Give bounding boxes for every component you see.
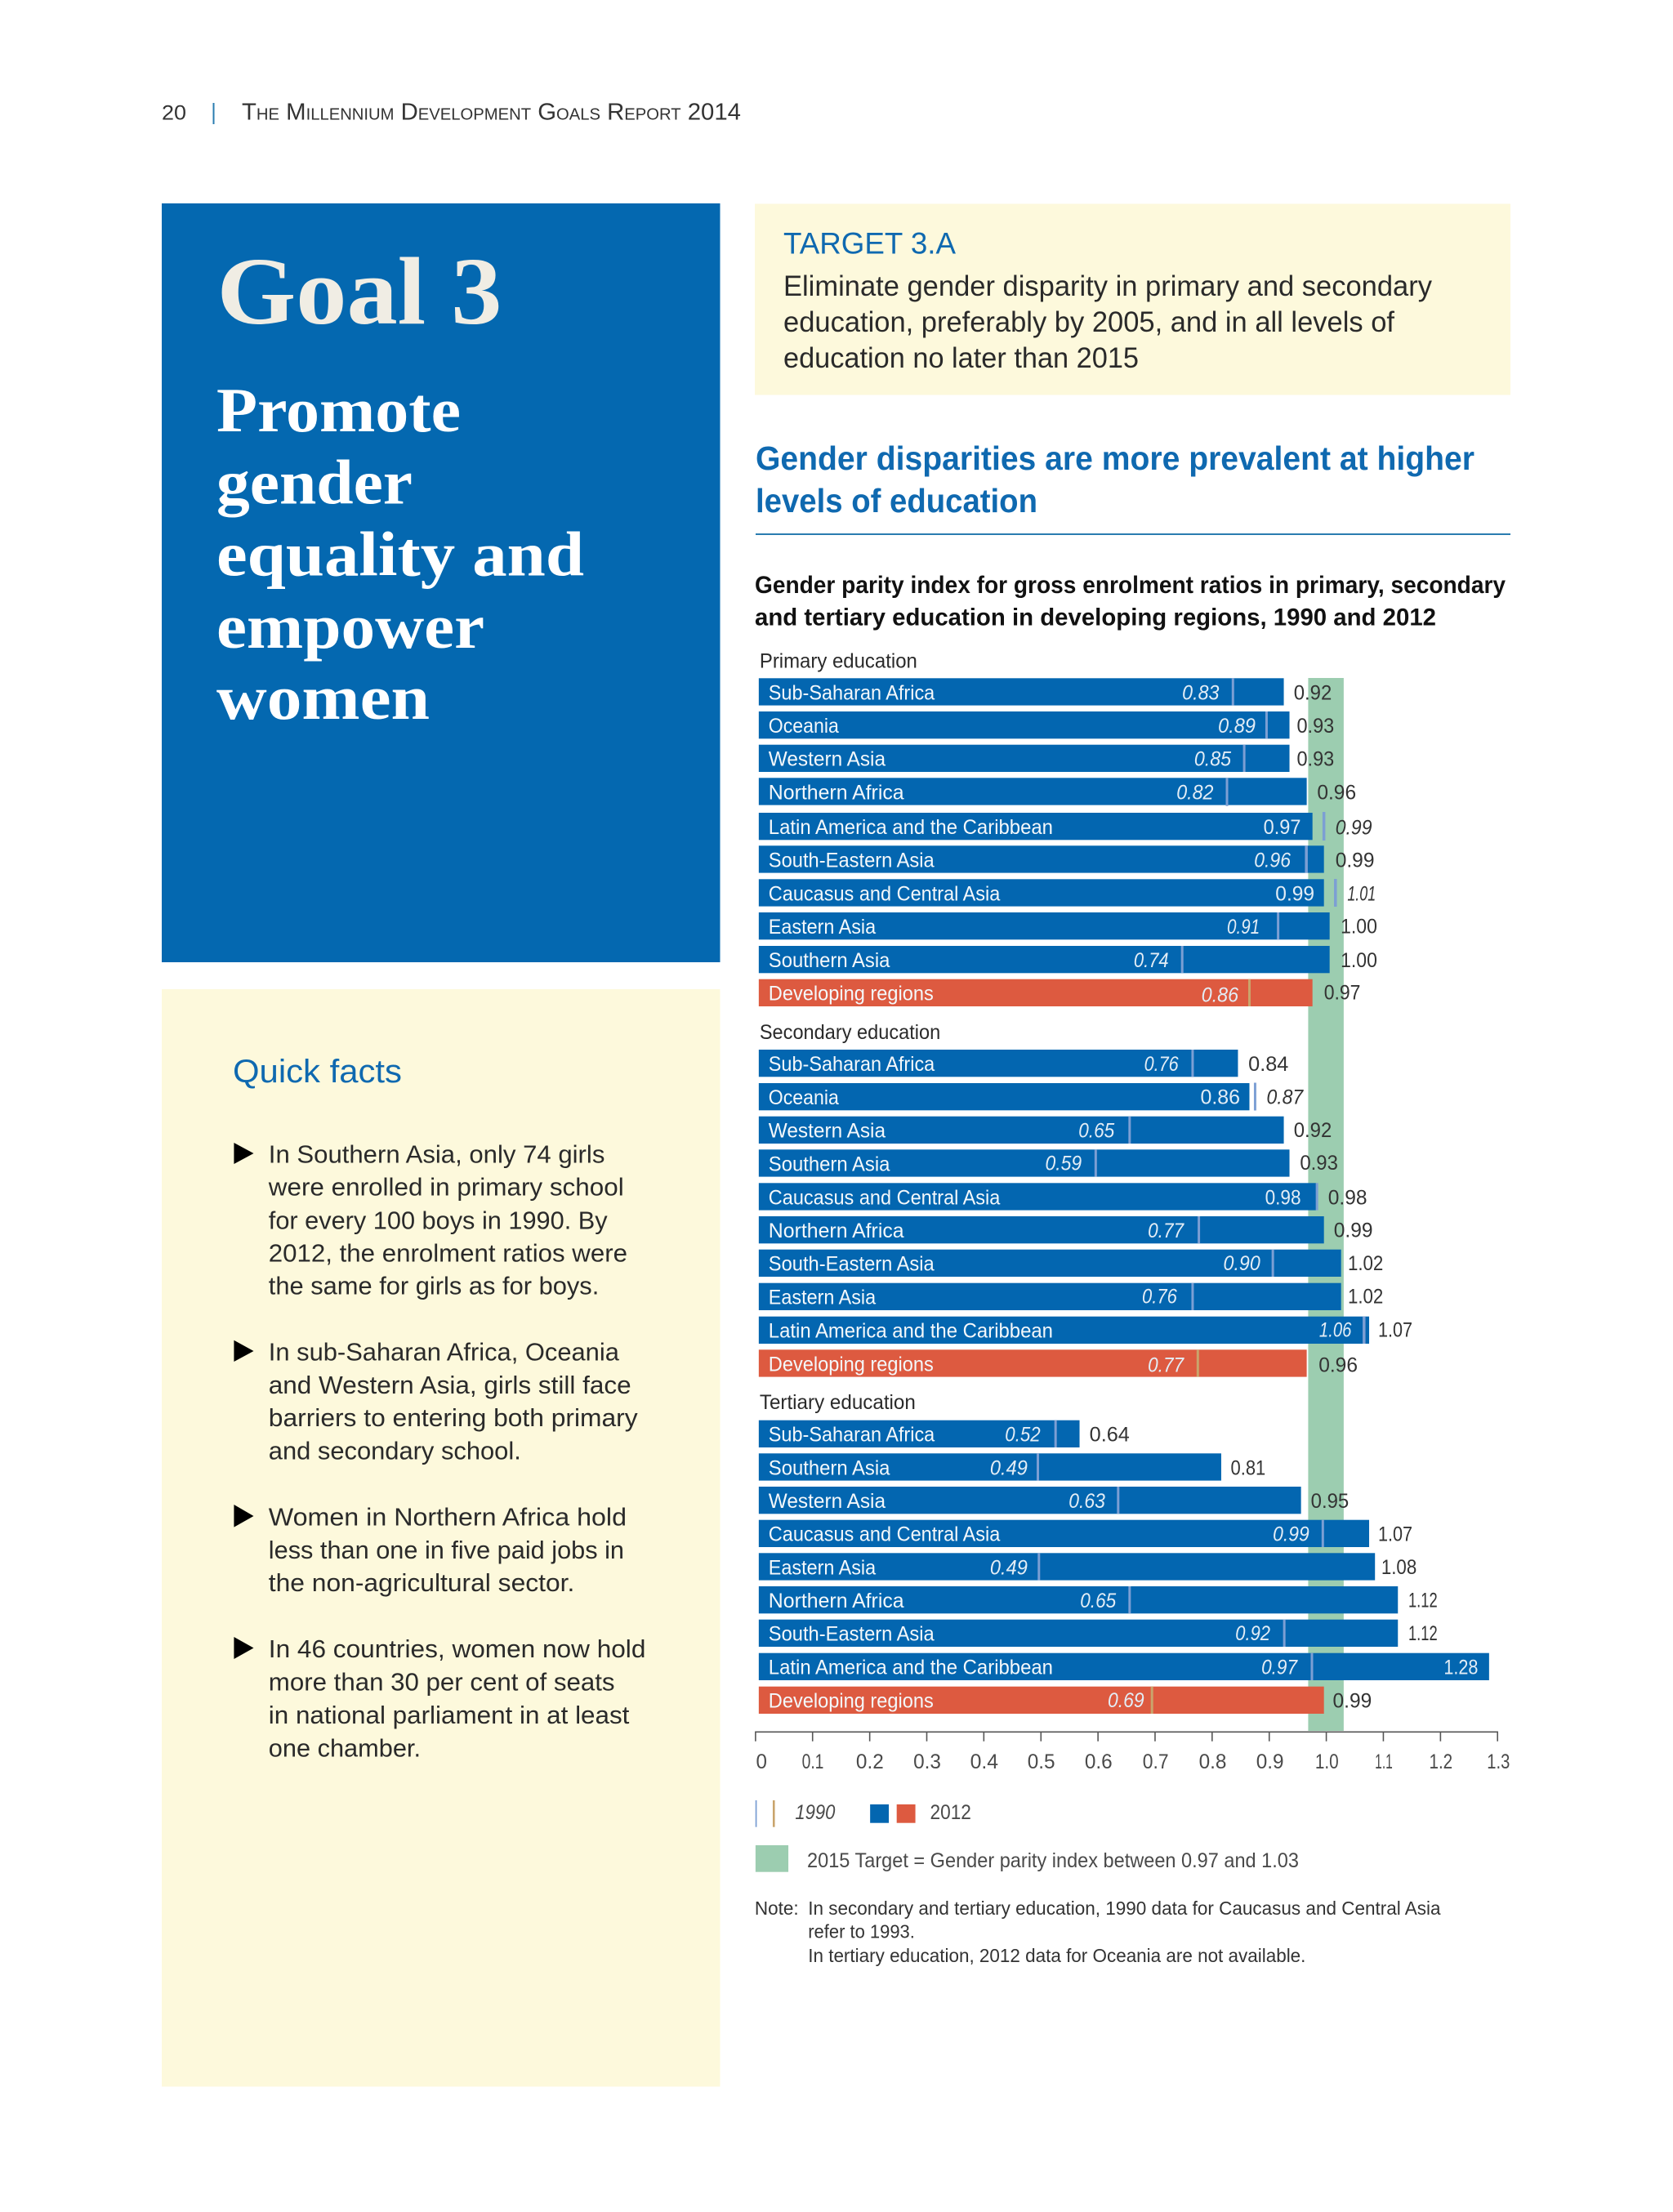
fact: southern asia: for every 100 boys in 1990. By: [269, 1206, 608, 1234]
tertiary: western asia: 0.63: [1068, 1490, 1105, 1513]
primary: sub-saharan africa: Sub-Saharan Africa: [769, 681, 935, 704]
primary: oceania: Oceania: [769, 715, 839, 738]
secondary: northern africa: Northern Africa: [769, 1220, 904, 1242]
section heading: Gender disparities are more prevalent at higher: [756, 439, 1474, 477]
heading: quick facts: Quick facts: [233, 1054, 402, 1090]
tertiary: developing regions: [759, 1687, 1372, 1714]
tertiary: sub-saharan africa: 0.64: [1090, 1424, 1130, 1447]
secondary: latin america and the caribbean: 1.07: [1378, 1318, 1412, 1342]
primary: developing regions: 0.97: [1324, 981, 1360, 1005]
panel: target 3.a: [755, 204, 1510, 395]
fact: sub-saharan africa: and secondary school.: [269, 1436, 521, 1465]
tertiary: eastern asia: [759, 1553, 1416, 1581]
fact: southern asia: 2012, the enrolment ratios were: [269, 1239, 627, 1268]
tertiary: developing regions: 0.99: [1333, 1690, 1372, 1713]
x axis: 0.9: [1256, 1750, 1284, 1773]
x axis: 1.3: [1487, 1750, 1510, 1773]
primary: developing regions: [759, 979, 1360, 1007]
primary: western asia: 0.85: [1194, 748, 1231, 771]
x axis: 0.3: [913, 1750, 941, 1773]
chart note: In tertiary education, 2012 data for Oceania are not available.: [808, 1945, 1305, 1966]
tertiary: latin america and the caribbean: 1.28: [1443, 1657, 1478, 1679]
tertiary: south-eastern asia: [759, 1620, 1438, 1647]
primary: northern africa: 0.82: [1176, 781, 1214, 804]
tertiary: developing regions: Developing regions: [769, 1690, 934, 1713]
target band: [1308, 678, 1344, 1731]
x axis: 0.6: [1085, 1750, 1113, 1773]
tertiary: southern asia: Southern Asia: [769, 1456, 890, 1479]
secondary: caucasus and central asia: [759, 1183, 1367, 1211]
primary: southern asia: [759, 946, 1377, 973]
secondary: south-eastern asia: [759, 1250, 1383, 1277]
tertiary: northern africa: 0.65: [1080, 1590, 1116, 1612]
secondary: western asia: 0.92: [1294, 1119, 1332, 1142]
fact: sub-saharan africa: In sub-Saharan Africa, Oceania: [269, 1338, 620, 1367]
secondary: developing regions: Developing regions: [769, 1353, 934, 1376]
bar chart: gender parity index: [756, 650, 1510, 1773]
tertiary: sub-saharan africa: Sub-Saharan Africa: [769, 1424, 935, 1447]
page header: 20: [162, 101, 186, 124]
secondary: northern africa: [759, 1216, 1372, 1243]
primary: northern africa: 0.96: [1317, 781, 1356, 804]
tertiary: latin america and the caribbean: [759, 1653, 1489, 1680]
secondary: eastern asia: 0.76: [1142, 1285, 1177, 1309]
primary: eastern asia: 0.91: [1227, 916, 1260, 939]
secondary: oceania: 0.86: [1200, 1086, 1240, 1109]
primary: developing regions: 0.86: [1202, 984, 1238, 1007]
secondary: southern asia: 0.93: [1300, 1152, 1338, 1175]
secondary: northern africa: 0.99: [1334, 1219, 1372, 1242]
legend: years: [756, 1800, 971, 1827]
heading: goal statement: [216, 375, 584, 733]
group label: secondary education: Secondary education: [760, 1021, 940, 1044]
secondary: southern asia: 0.59: [1045, 1152, 1082, 1175]
secondary: developing regions: 0.77: [1148, 1354, 1184, 1376]
primary: eastern asia: 1.00: [1341, 915, 1377, 939]
x axis: 1.1: [1375, 1750, 1393, 1773]
secondary: southern asia: [759, 1149, 1338, 1177]
primary: latin america and the caribbean: 0.97: [1264, 816, 1300, 839]
secondary: developing regions: [759, 1349, 1358, 1377]
fact: southern asia: were enrolled in primary school: [268, 1173, 624, 1202]
fact: national parliaments: more than 30 per cent of seats: [269, 1668, 614, 1697]
primary: southern asia: Southern Asia: [769, 949, 890, 972]
primary: latin america and the caribbean: 0.99: [1336, 816, 1372, 840]
primary: sub-saharan africa: [759, 678, 1332, 706]
primary: caucasus and central asia: 0.99: [1275, 882, 1314, 905]
x axis: 0.2: [856, 1750, 884, 1773]
fact: sub-saharan africa: and Western Asia, girls still face: [269, 1371, 631, 1399]
secondary: northern africa: 0.77: [1148, 1220, 1184, 1242]
secondary: latin america and the caribbean: Latin America and the Caribbean: [769, 1320, 1053, 1343]
primary: caucasus and central asia: [759, 879, 1376, 907]
chart note: In secondary and tertiary education, 1990 data for Caucasus and Central Asia: [808, 1898, 1441, 1919]
fact: sub-saharan africa: barriers to entering both primary: [269, 1403, 638, 1432]
secondary: oceania: Oceania: [769, 1086, 839, 1109]
chart title: and tertiary education in developing regions, 1990 and 2012: [755, 604, 1436, 631]
primary: caucasus and central asia: 1.01: [1347, 882, 1376, 905]
chart note: Note:: [755, 1898, 799, 1919]
secondary: western asia: [759, 1117, 1332, 1144]
page header: The Millennium Development Goals Report 2014: [242, 100, 741, 126]
primary: eastern asia: Eastern Asia: [769, 916, 876, 939]
x axis: 0.7: [1143, 1750, 1169, 1773]
secondary: latin america and the caribbean: [759, 1317, 1412, 1344]
tertiary: latin america and the caribbean: 0.97: [1261, 1657, 1298, 1679]
panel: quick facts: [162, 989, 721, 2086]
secondary: oceania: [759, 1083, 1304, 1111]
panel: goal 3: [162, 203, 721, 962]
x axis: 1.2: [1429, 1750, 1452, 1773]
x axis: 0.8: [1199, 1750, 1226, 1773]
target text: education no later than 2015: [783, 342, 1139, 374]
target text: education, preferably by 2005, and in all levels of: [783, 306, 1394, 338]
secondary: eastern asia: Eastern Asia: [769, 1287, 876, 1309]
secondary: south-eastern asia: 1.02: [1348, 1252, 1383, 1275]
secondary: sub-saharan africa: [759, 1050, 1288, 1077]
x axis: 0.5: [1028, 1750, 1055, 1773]
tertiary: south-eastern asia: 1.12: [1408, 1622, 1438, 1645]
fact: southern asia: [234, 1139, 627, 1300]
x axis: 0.4: [970, 1750, 998, 1773]
chart note: refer to 1993.: [808, 1921, 915, 1942]
tertiary: developing regions: 0.69: [1108, 1689, 1144, 1712]
tertiary: sub-saharan africa: 0.52: [1005, 1424, 1041, 1447]
tertiary: latin america and the caribbean: Latin America and the Caribbean: [769, 1657, 1053, 1679]
chart title: [755, 572, 1506, 631]
x axis: 0.1: [802, 1750, 823, 1773]
primary: northern africa: [759, 778, 1356, 806]
tertiary: caucasus and central asia: [759, 1520, 1412, 1547]
legend: years: 2012: [930, 1801, 971, 1824]
secondary: south-eastern asia: 0.90: [1224, 1252, 1260, 1275]
section heading: levels of education: [756, 482, 1037, 520]
secondary: oceania: 0.87: [1266, 1086, 1304, 1109]
primary: caucasus and central asia: Caucasus and Central Asia: [769, 882, 1000, 905]
fact: northern africa: Women in Northern Africa hold: [269, 1503, 627, 1532]
secondary: western asia: 0.65: [1078, 1120, 1114, 1143]
tertiary: caucasus and central asia: 0.99: [1273, 1523, 1309, 1546]
tertiary: southern asia: [759, 1453, 1265, 1481]
secondary: caucasus and central asia: 0.98: [1265, 1186, 1301, 1209]
section heading: [756, 439, 1474, 520]
heading: goal statement: equality and: [216, 520, 584, 590]
x axis: 1.0: [1315, 1750, 1339, 1773]
tertiary: northern africa: 1.12: [1408, 1589, 1438, 1612]
heading: goal statement: gender: [216, 448, 413, 518]
secondary: south-eastern asia: South-Eastern Asia: [769, 1253, 935, 1276]
secondary: eastern asia: 1.02: [1348, 1285, 1383, 1309]
primary: oceania: [759, 711, 1334, 738]
primary: sub-saharan africa: 0.92: [1294, 681, 1332, 704]
tertiary: eastern asia: Eastern Asia: [769, 1556, 876, 1579]
fact: national parliaments: In 46 countries, women now hold: [269, 1634, 645, 1663]
secondary: sub-saharan africa: 0.84: [1248, 1053, 1288, 1076]
target heading: TARGET 3.A: [783, 227, 956, 261]
fact: sub-saharan africa: [234, 1338, 638, 1465]
secondary: developing regions: 0.96: [1318, 1354, 1358, 1376]
fact: northern africa: [234, 1503, 627, 1597]
fact: northern africa: less than one in five paid jobs in: [269, 1536, 624, 1564]
primary: northern africa: Northern Africa: [769, 781, 904, 804]
tertiary: eastern asia: 0.49: [990, 1556, 1028, 1579]
primary: south-eastern asia: 0.99: [1336, 849, 1374, 872]
primary: developing regions: Developing regions: [769, 983, 934, 1006]
tertiary: south-eastern asia: 0.92: [1235, 1622, 1270, 1645]
tertiary: southern asia: 0.81: [1230, 1456, 1265, 1479]
primary: western asia: 0.93: [1296, 748, 1334, 771]
tertiary: eastern asia: 1.08: [1381, 1556, 1416, 1579]
tertiary: western asia: Western Asia: [769, 1490, 886, 1513]
tertiary: south-eastern asia: South-Eastern Asia: [769, 1623, 935, 1646]
group label: primary education: Primary education: [760, 650, 917, 673]
primary: oceania: 0.89: [1218, 715, 1256, 738]
primary: southern asia: 1.00: [1341, 949, 1377, 972]
fact: southern asia: the same for girls as for boys.: [269, 1272, 599, 1300]
heading: goal statement: women: [216, 662, 430, 733]
secondary: western asia: Western Asia: [769, 1120, 886, 1143]
primary: sub-saharan africa: 0.83: [1182, 681, 1220, 704]
primary: south-eastern asia: [759, 845, 1374, 873]
heading: goal statement: Promote: [216, 375, 461, 445]
chart note: [755, 1898, 1441, 1966]
primary: western asia: Western Asia: [769, 748, 886, 771]
x axis: 0: [756, 1750, 767, 1773]
secondary: sub-saharan africa: Sub-Saharan Africa: [769, 1053, 935, 1076]
secondary: southern asia: Southern Asia: [769, 1153, 890, 1175]
tertiary: southern asia: 0.49: [990, 1456, 1028, 1479]
heading: goal number: Goal 3: [217, 238, 502, 345]
legend: years: 1990: [795, 1801, 835, 1824]
primary: southern asia: 0.74: [1134, 949, 1169, 972]
heading: goal statement: empower: [216, 591, 484, 662]
secondary: sub-saharan africa: 0.76: [1144, 1053, 1179, 1076]
primary: western asia: [759, 745, 1334, 772]
fact: southern asia: In Southern Asia, only 74 girls: [269, 1139, 605, 1168]
tertiary: caucasus and central asia: 1.07: [1378, 1523, 1412, 1546]
group label: tertiary education: Tertiary education: [760, 1391, 916, 1414]
tertiary: northern africa: Northern Africa: [769, 1590, 904, 1612]
tertiary: western asia: 0.95: [1311, 1490, 1349, 1513]
x axis: [756, 1732, 1510, 1773]
target text: Eliminate gender disparity in primary and secondary: [783, 270, 1432, 302]
primary: oceania: 0.93: [1296, 715, 1334, 738]
primary: south-eastern asia: 0.96: [1254, 849, 1291, 872]
fact: northern africa: the non-agricultural sector.: [269, 1568, 574, 1597]
fact: national parliaments: in national parliament in at least: [269, 1701, 630, 1729]
secondary: caucasus and central asia: Caucasus and Central Asia: [769, 1186, 1000, 1209]
secondary: latin america and the caribbean: 1.06: [1319, 1318, 1352, 1342]
secondary: caucasus and central asia: 0.98: [1328, 1186, 1367, 1209]
tertiary: caucasus and central asia: Caucasus and Central Asia: [769, 1523, 1000, 1546]
tertiary: sub-saharan africa: [759, 1420, 1130, 1447]
primary: eastern asia: [759, 912, 1377, 939]
tertiary: northern africa: [759, 1586, 1438, 1613]
primary: south-eastern asia: South-Eastern Asia: [769, 849, 935, 872]
chart title: Gender parity index for gross enrolment ratios in primary, secondary: [755, 572, 1506, 599]
primary: latin america and the caribbean: [759, 812, 1372, 841]
legend: 2015 target: 2015 Target = Gender parity index between 0.97 and 1.03: [807, 1849, 1299, 1872]
secondary: eastern asia: [759, 1283, 1383, 1310]
fact: national parliaments: one chamber.: [269, 1734, 421, 1763]
primary: latin america and the caribbean: Latin America and the Caribbean: [769, 816, 1053, 839]
target text: [783, 270, 1432, 374]
fact: national parliaments: [234, 1634, 645, 1763]
tertiary: western asia: [759, 1487, 1349, 1514]
